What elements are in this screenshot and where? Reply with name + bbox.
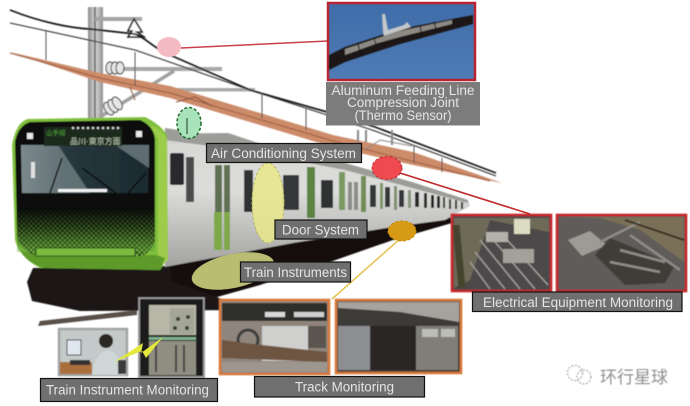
label: train instruments: Train Instruments xyxy=(244,265,347,280)
marker: electrical equipment xyxy=(372,156,402,180)
callout line: track xyxy=(332,238,401,299)
marker: track xyxy=(388,221,416,241)
insulator top xyxy=(128,19,144,37)
marker: door system xyxy=(252,163,284,243)
label: aluminum feeding line xyxy=(326,82,480,126)
marker: air conditioning xyxy=(177,108,201,138)
arm lower xyxy=(165,88,255,92)
photo: track monitoring right xyxy=(336,300,461,373)
destination display xyxy=(44,127,122,146)
label: aluminum feeding line: Aluminum Feeding Line xyxy=(332,83,474,98)
upper bracket xyxy=(95,17,142,21)
train: 品川·東京方面 xyxy=(70,136,121,146)
train side body xyxy=(165,128,470,267)
undercarriage xyxy=(165,215,452,300)
marker: thermo sensor xyxy=(157,37,181,57)
photo: equipment cabinet xyxy=(139,298,204,377)
label: electrical equipment monitoring: Electrical Equipment Monitoring xyxy=(483,295,673,310)
label: train instrument monitoring: Train Instrument Monitoring xyxy=(46,382,209,398)
thick wire xyxy=(10,10,496,173)
photo: operator at monitor xyxy=(59,329,127,375)
label: aluminum feeding line: (Thermo Sensor) xyxy=(354,108,452,123)
wipers xyxy=(50,158,146,193)
marker lights xyxy=(27,133,33,139)
diagonal arm xyxy=(100,71,174,117)
label: air conditioning system: Air Conditioning System xyxy=(211,146,356,161)
photo: electrical equipment left xyxy=(452,215,551,291)
photo: electrical equipment right xyxy=(557,215,686,291)
rail wedge xyxy=(38,310,137,326)
droppers xyxy=(46,31,442,172)
lower green slot xyxy=(36,248,135,256)
callout line: electrical equipment xyxy=(400,173,530,214)
roof xyxy=(165,128,468,203)
photo: aluminum feeding line joint xyxy=(328,3,475,80)
support pole xyxy=(88,7,103,119)
label: track monitoring xyxy=(254,376,424,397)
watermark text: 环行星球 xyxy=(600,368,668,387)
windshield xyxy=(21,145,149,193)
feeding line beam xyxy=(10,52,502,183)
label: electrical equipment monitoring xyxy=(472,292,682,312)
train front shell xyxy=(12,117,168,270)
train: 山手線 xyxy=(46,128,66,137)
halftone lower face xyxy=(17,208,155,256)
photo: track monitoring left xyxy=(220,300,329,374)
icon: watermark logo xyxy=(568,366,591,384)
watermark xyxy=(568,366,668,387)
overhead line structure xyxy=(10,7,502,183)
label: door system xyxy=(275,220,367,239)
thin wire xyxy=(10,23,496,176)
windows and doors xyxy=(170,153,463,250)
label: aluminum feeding line: Compression Joint xyxy=(347,95,459,110)
arm upper xyxy=(120,67,222,71)
insulator upper xyxy=(106,62,124,74)
marker: train instruments xyxy=(188,246,278,296)
icon: lightning bolt xyxy=(114,337,163,362)
label: door system: Door System xyxy=(282,222,359,238)
insulator lower xyxy=(102,95,124,117)
label: train instrument monitoring xyxy=(40,378,218,402)
label: track monitoring: Track Monitoring xyxy=(295,380,394,394)
train xyxy=(12,117,470,326)
callout line: thermo sensor xyxy=(181,41,328,48)
train front black face xyxy=(15,120,155,256)
